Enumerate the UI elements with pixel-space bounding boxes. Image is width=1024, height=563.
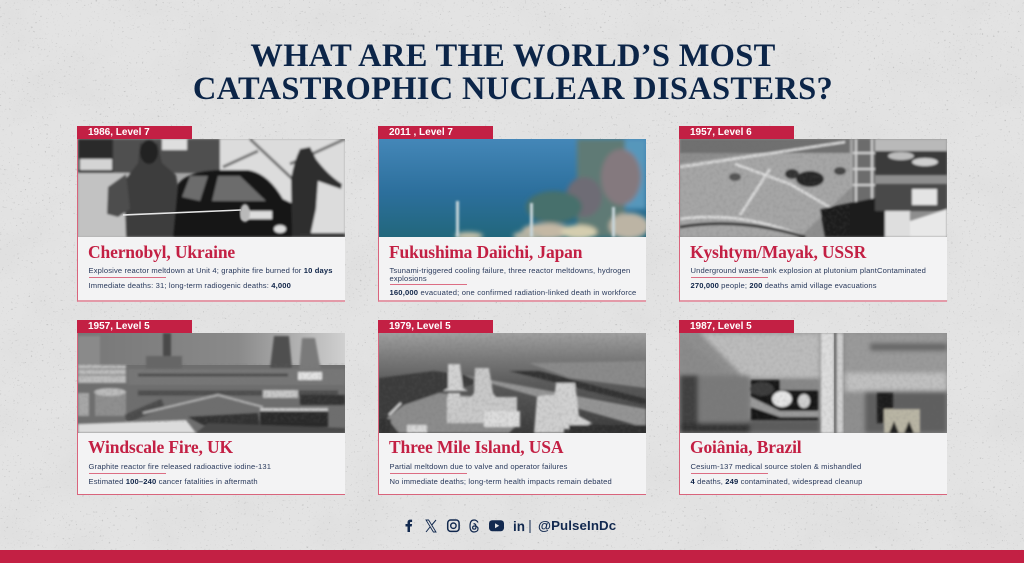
panel: Goiania — [679, 333, 947, 495]
tag: year and level: 2011 , Level 7 — [389, 127, 453, 138]
photo: Windscale site with cooling towers — [78, 333, 345, 433]
icons: social media: in — [513, 519, 525, 534]
tag: year and level — [378, 126, 493, 139]
photo: Fukushima plant smoke plumes — [379, 139, 646, 237]
tag: year and level — [679, 126, 794, 139]
heading: Chernobyl, Ukraine — [88, 242, 235, 262]
fact: cause: Explosive reactor meltdown at Unit 4; graphite fire burned for 10 days — [88, 266, 333, 275]
panel: Three Mile Island — [378, 333, 646, 495]
fact: cause: Graphite reactor fire released radioactive iodine-131 — [88, 462, 271, 471]
tag: year and level: 1986, Level 7 — [88, 127, 150, 138]
title: WHAT ARE THE WORLD’S MOST — [250, 38, 776, 74]
tag: year and level: 1987, Level 5 — [690, 321, 752, 332]
fact: cause: Underground waste-tank explosion at plutonium plantContaminated — [690, 266, 926, 275]
panel: Windscale — [77, 333, 345, 495]
heading: Fukushima Daiichi, Japan — [389, 242, 582, 262]
tag: year and level — [77, 320, 192, 333]
fact: toll: 4 deaths, 249 contaminated, widespread cleanup — [690, 477, 862, 486]
fact: toll: 160,000 evacuated; one confirmed radiation-linked death in workforce — [390, 288, 636, 297]
fact: toll: Estimated 100–240 cancer fatalities in aftermath — [88, 477, 258, 486]
photo: Three Mile Island cooling towers — [379, 333, 646, 433]
photo: aerial view of damaged plant — [680, 139, 947, 237]
tag: year and level: 1979, Level 5 — [389, 321, 451, 332]
photo: grainy Goiania hospital scene — [680, 333, 947, 433]
fact: cause: Cesium-137 medical source stolen & mishandled — [690, 462, 861, 471]
heading: Kyshtym/Mayak, USSR — [690, 242, 866, 262]
fact: toll: Immediate deaths: 31; long-term radiogenic deaths: 4,000 — [88, 281, 291, 290]
social handle: @PulseInDc — [538, 518, 616, 533]
fact: toll: No immediate deaths; long-term health impacts remain debated — [390, 477, 612, 486]
tag: year and level: 1957, Level 6 — [690, 127, 752, 138]
panel: Chernobyl — [77, 139, 345, 302]
panel: Fukushima — [378, 139, 646, 302]
tag: year and level — [679, 320, 794, 333]
footer bar — [0, 550, 1024, 563]
title: CATASTROPHIC NUCLEAR DISASTERS? — [193, 71, 833, 107]
photo: Chernobyl workers in protective gear beside a car — [78, 139, 345, 237]
fact: toll: 270,000 people; 200 deaths amid village evacuations — [690, 281, 877, 290]
fact: cause: Partial meltdown due to valve and operator failures — [390, 462, 568, 471]
tag: year and level: 1957, Level 5 — [88, 321, 150, 332]
fact: cause: Tsunami-triggered cooling failure, three reactor meltdowns, hydrogen explosions — [390, 266, 630, 283]
tag: year and level — [77, 126, 192, 139]
heading: Three Mile Island, USA — [389, 437, 563, 457]
panel: Kyshtym/Mayak — [679, 139, 947, 302]
footer: social icons and handle — [406, 518, 616, 534]
title — [193, 38, 833, 107]
icons: social media — [406, 519, 530, 534]
heading: Windscale Fire, UK — [88, 437, 233, 457]
heading: Goiânia, Brazil — [690, 437, 802, 457]
tag: year and level — [378, 320, 493, 333]
